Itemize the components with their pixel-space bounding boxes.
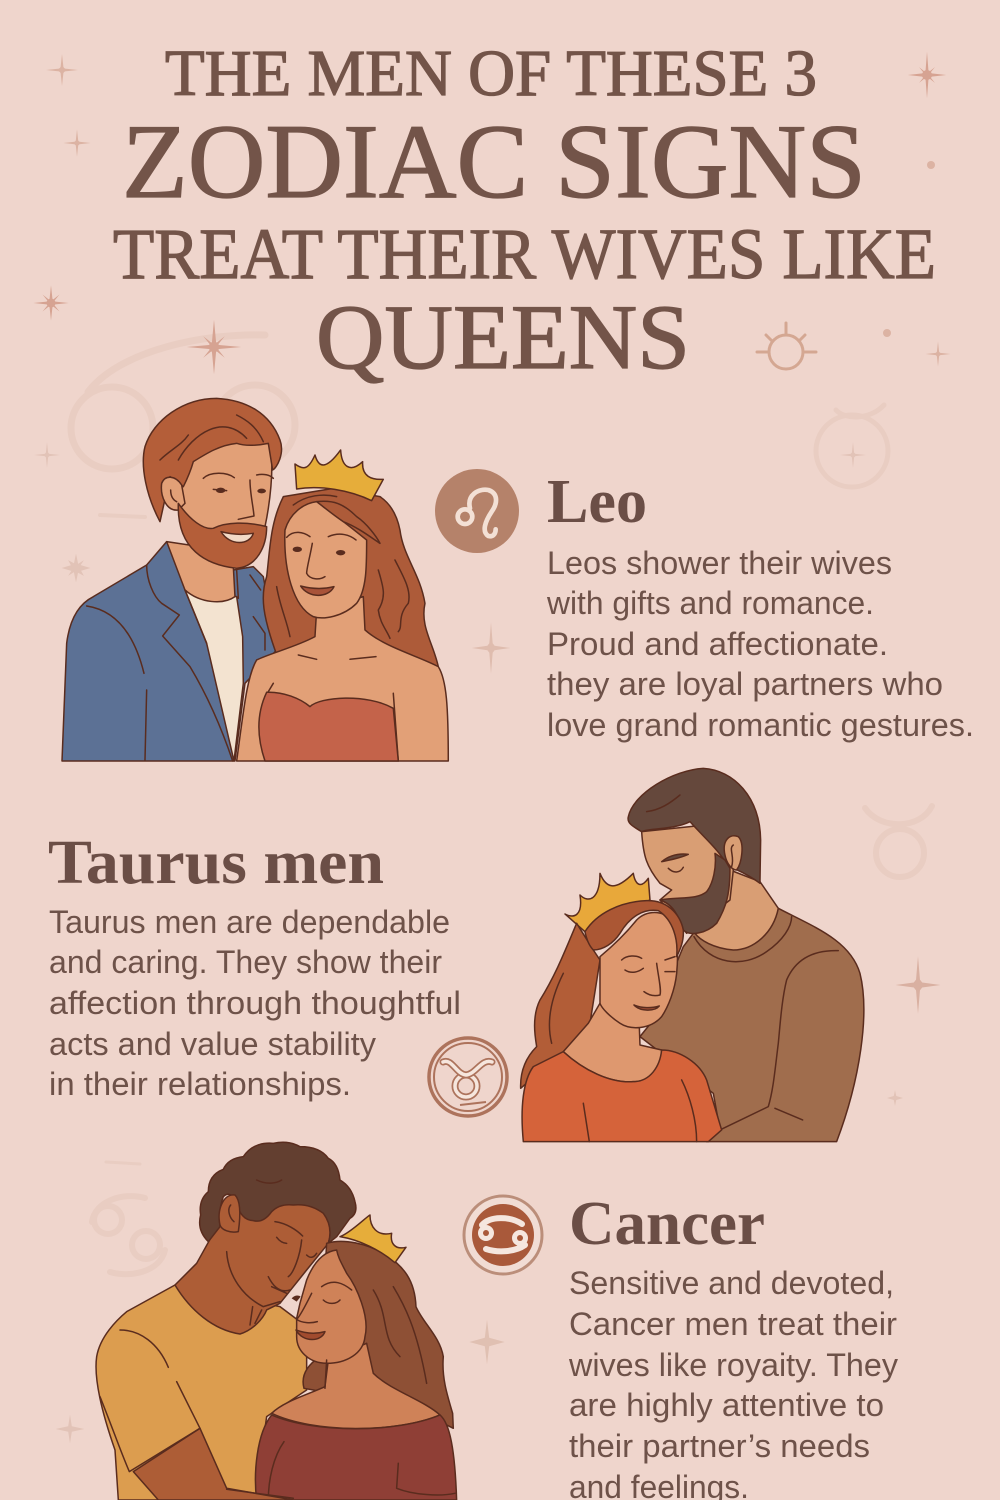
icon: Cancer badge	[464, 1196, 542, 1274]
title: THE MEN OF THESE 3	[165, 37, 817, 110]
faint zodiac symbol: cancer bottom left	[92, 1162, 165, 1274]
Taurus heading: Taurus men	[48, 829, 384, 897]
illustration: Taurus couple	[521, 768, 864, 1142]
Cancer text: are highly attentive to	[569, 1387, 884, 1423]
title	[113, 37, 936, 388]
Leo text: Leos shower their wives	[547, 545, 892, 581]
faint background stars	[34, 442, 940, 1443]
decorative eight point stars	[33, 52, 946, 374]
title: ZODIAC SIGNS	[122, 103, 866, 220]
Leo text: they are loyal partners who	[547, 666, 943, 702]
Cancer text: Cancer men treat their	[569, 1306, 897, 1342]
Cancer text: Sensitive and devoted,	[569, 1265, 894, 1301]
title: TREAT THEIR WIVES LIKE	[113, 214, 936, 294]
Leo text: Proud and affectionate.	[547, 626, 888, 662]
Leo text	[546, 545, 974, 743]
illustration: Cancer couple	[96, 1142, 457, 1500]
Cancer text	[568, 1265, 898, 1500]
icon: Taurus badge	[429, 1038, 507, 1116]
illustration: Leo couple	[62, 398, 448, 761]
decorative stars	[46, 54, 950, 366]
Leo text: with gifts and romance.	[546, 585, 874, 621]
Leo heading: Leo	[547, 468, 647, 536]
Cancer heading: Cancer	[569, 1190, 765, 1258]
Taurus text: and caring. They show their	[49, 944, 442, 980]
faint zodiac symbol: taurus right	[816, 405, 888, 487]
Taurus text: in their relationships.	[49, 1066, 351, 1102]
title: QUEENS	[316, 286, 690, 388]
Taurus text: Taurus men are dependable	[49, 904, 450, 940]
icon: sun symbol	[757, 323, 816, 369]
Taurus text: acts and value stability	[49, 1026, 376, 1062]
Taurus text: affection through thoughtful	[49, 985, 461, 1021]
faint zodiac symbol: cancer top left	[71, 335, 295, 517]
Cancer text: wives like royaity. They	[568, 1347, 898, 1383]
Cancer text: their partner’s needs	[569, 1428, 870, 1464]
icon: Leo badge	[435, 469, 519, 553]
faint zodiac symbol: taurus mid right	[865, 806, 932, 877]
Leo text: love grand romantic gestures.	[547, 707, 974, 743]
Taurus text	[49, 904, 461, 1102]
